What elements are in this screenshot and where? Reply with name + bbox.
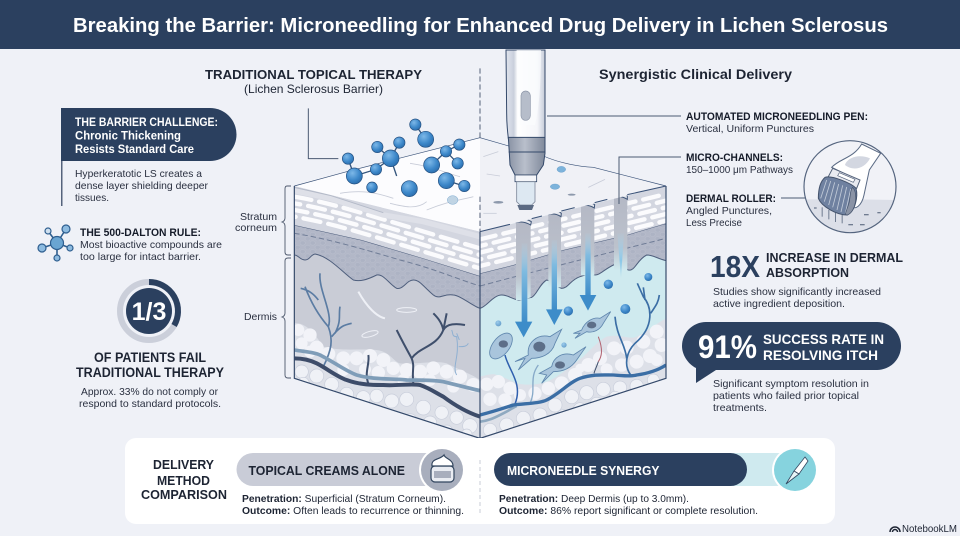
drug molecules cluster (342, 119, 470, 197)
label: micro-channels: 150–1000 μm Pathways (686, 164, 793, 176)
panel: barrier challenge: Hyperkeratotic LS creates a (75, 168, 202, 180)
fibres (358, 292, 417, 339)
pill: microneedle synergy (494, 453, 790, 486)
stat: 18x absorption: INCREASE IN DERMAL (766, 250, 903, 265)
text: symptom resolution: Significant symptom resolution in (713, 378, 869, 390)
label: stratum corneum (235, 186, 291, 255)
stat text: patients fail (76, 350, 224, 410)
watermark: NotebookLM: NotebookLM (902, 523, 957, 535)
heading: synergistic clinical delivery: Synergistic Clinical Delivery (599, 66, 792, 82)
label: automated microneedling pen: AUTOMATED MICRONEEDLING PEN: (686, 111, 868, 123)
left skin block (292, 183, 481, 443)
dermal cells (485, 312, 611, 383)
label: dermal roller: Angled Punctures, (686, 205, 772, 217)
branching vessels (301, 273, 468, 383)
text: 500-dalton rule: THE 500-DALTON RULE: (80, 227, 201, 239)
pill: topical creams alone (237, 453, 440, 486)
callout: 91 percent success: SUCCESS RATE IN (763, 331, 884, 347)
leader: pen (547, 115, 681, 117)
label: dermal roller (686, 193, 805, 229)
text: 500-dalton rule: too large for intact barrier. (80, 251, 201, 263)
text: 500-dalton rule: Most bioactive compounds are (80, 239, 222, 251)
text: topical outcome: Penetration: Superficial (Stratum Corneum). (242, 493, 446, 505)
panel: barrier challenge: Chronic Thickening (75, 130, 181, 142)
skin cross-section diagram (292, 50, 669, 443)
arrows (522, 233, 624, 323)
heading: comparison: COMPARISON (141, 487, 227, 502)
label: dermal roller: Less Precise (686, 217, 742, 229)
vessels (294, 350, 480, 417)
callout: 91 percent success (682, 322, 901, 383)
label: automated microneedling pen: Vertical, Uniform Punctures (686, 123, 814, 135)
center dashed divider (478, 68, 481, 232)
text: topical outcome: Outcome: Often leads to recurrence or thinning. (242, 505, 464, 517)
panel: barrier challenge: tissues. (75, 192, 109, 204)
text: 500-dalton rule (80, 227, 222, 263)
text: symptom resolution: treatments. (713, 402, 767, 414)
heading: traditional topical therapy: TRADITIONAL TOPICAL THERAPY (205, 67, 422, 82)
leader: molecules (308, 108, 338, 159)
stat: 18x absorption: ABSORPTION (766, 265, 849, 280)
pill: topical creams alone: TOPICAL CREAMS ALONE (248, 463, 405, 478)
drug droplets (495, 273, 652, 348)
heading: traditional topical therapy (205, 67, 422, 96)
label: dermis: Dermis (244, 311, 277, 323)
vessels (480, 283, 666, 422)
micro-channels (516, 196, 627, 300)
text: symptom resolution (713, 378, 869, 414)
stratum band (294, 186, 480, 276)
panel: barrier challenge (61, 108, 236, 206)
text: topical outcome (242, 493, 464, 517)
stat: 18x absorption: active ingredient deposition. (713, 298, 845, 310)
text: microneedle outcome: Outcome: 86% report significant or complete resolution. (499, 505, 758, 517)
granular band (294, 225, 480, 308)
stat text: patients fail: OF PATIENTS FAIL (94, 350, 206, 365)
stat text: patients fail: respond to standard protocols. (79, 398, 221, 410)
icon: cream jar (419, 447, 465, 493)
heading: comparison (141, 457, 227, 502)
label: micro-channels: MICRO-CHANNELS: (686, 152, 783, 164)
heading: comparison: METHOD (157, 473, 210, 488)
right skin block (480, 183, 669, 443)
donut: one third (120, 282, 178, 340)
fat layer (292, 323, 480, 440)
heading: comparison: DELIVERY (153, 457, 214, 472)
leader: micro-channels (619, 157, 681, 204)
donut: one third: 1/3 (132, 298, 166, 326)
label: stratum corneum: Stratum (240, 211, 277, 223)
text: microneedle outcome: Penetration: Deep Dermis (up to 3.0mm). (499, 493, 689, 505)
label: dermal roller: DERMAL ROLLER: (686, 193, 776, 205)
top skin surface (294, 138, 666, 232)
stat: 18x absorption (710, 249, 903, 310)
stat: 18x absorption: 18X (710, 249, 760, 284)
heading: traditional topical therapy: (Lichen Sclerosus Barrier) (244, 82, 383, 96)
text: microneedle outcome (499, 493, 758, 517)
stat: 18x absorption: Studies show significantly increased (713, 286, 881, 298)
stat text: patients fail: Approx. 33% do not comply or (81, 386, 218, 398)
label: automated microneedling pen (686, 111, 868, 135)
fat layer (480, 318, 669, 440)
panel: barrier challenge: Resists Standard Care (75, 144, 194, 156)
callout: 91 percent success: 91% (698, 329, 757, 365)
pill: microneedle synergy: MICRONEEDLE SYNERGY (507, 463, 660, 478)
icon: molecule (38, 225, 73, 261)
panel: barrier challenge: THE BARRIER CHALLENGE: (75, 117, 218, 129)
label: dermis (244, 258, 291, 378)
microneedling pen (506, 50, 545, 210)
block outlines (294, 186, 666, 438)
icon: microneedle pen (772, 447, 818, 493)
panel: delivery method comparison (125, 438, 835, 524)
callout: 91 percent success: RESOLVING ITCH (763, 347, 878, 363)
title banner (0, 0, 960, 49)
text: symptom resolution: patients who failed prior topical (713, 390, 859, 402)
title banner: Breaking the Barrier: Microneedling for Enhanced Drug Delivery in Lichen Sclerosus (73, 15, 888, 37)
label: micro-channels (686, 152, 793, 176)
panel: barrier challenge: dense layer shielding deeper (75, 180, 208, 192)
label: stratum corneum: corneum (235, 222, 277, 234)
stat text: patients fail: TRADITIONAL THERAPY (76, 365, 224, 380)
stratum band (480, 186, 666, 273)
granular band (480, 223, 666, 308)
icon: dermal roller (803, 141, 897, 237)
